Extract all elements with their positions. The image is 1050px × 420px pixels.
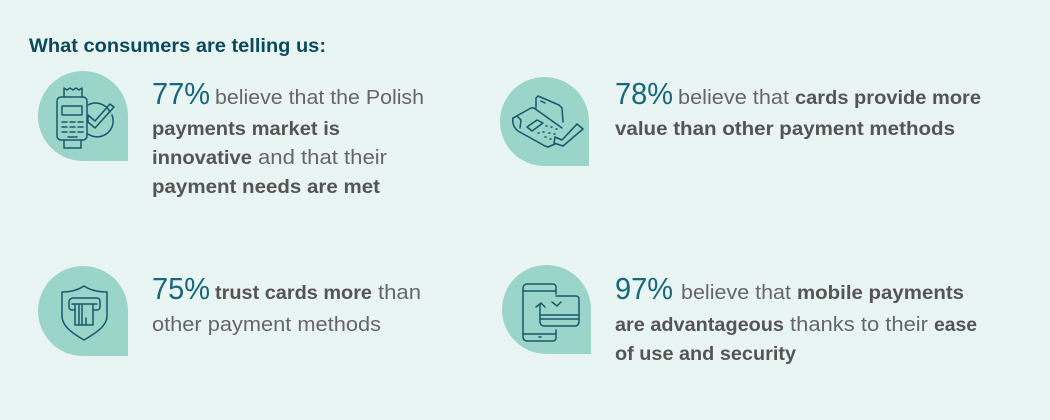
panel: 78% cards provide value [500, 76, 981, 166]
stat text: payments market is [152, 118, 340, 140]
stat text [152, 76, 424, 198]
stat text: believe that [681, 282, 791, 304]
stat text: believe that [678, 87, 789, 109]
title: What consumers are telling us: [29, 36, 326, 57]
stat text [615, 76, 981, 140]
stat text: than [378, 282, 421, 304]
stat text: believe that the Polish [215, 87, 424, 109]
stat text: and that their [258, 147, 387, 169]
icon: payment terminal with check [38, 71, 128, 161]
panel: 77% innovative market [38, 71, 424, 198]
icon: card reader with check [500, 77, 589, 166]
panel: 75% trust cards [38, 266, 421, 356]
stat text: are advantageous [615, 314, 784, 336]
stat text: 97% [615, 271, 673, 306]
stat text: payment needs are met [152, 176, 381, 198]
stat text: mobile payments [797, 282, 964, 304]
stat text: value than other payment methods [615, 118, 955, 140]
stat text: 77% [152, 76, 210, 111]
stat text: trust cards more [215, 282, 372, 304]
stat text: other payment methods [152, 314, 381, 336]
stat text: ease [934, 314, 977, 336]
icon: phone and card [502, 265, 591, 354]
stat text: thanks to their [790, 314, 928, 336]
stat text [152, 271, 421, 336]
stat text [615, 271, 977, 365]
panel: 97% mobile payments [502, 265, 977, 365]
stat text: cards provide more [795, 87, 981, 109]
stat text: of use and security [615, 343, 796, 365]
stat text: 75% [152, 271, 210, 306]
icon: shield with card slot [38, 266, 128, 356]
stat text: 78% [615, 76, 673, 111]
stat text: innovative [152, 147, 252, 169]
